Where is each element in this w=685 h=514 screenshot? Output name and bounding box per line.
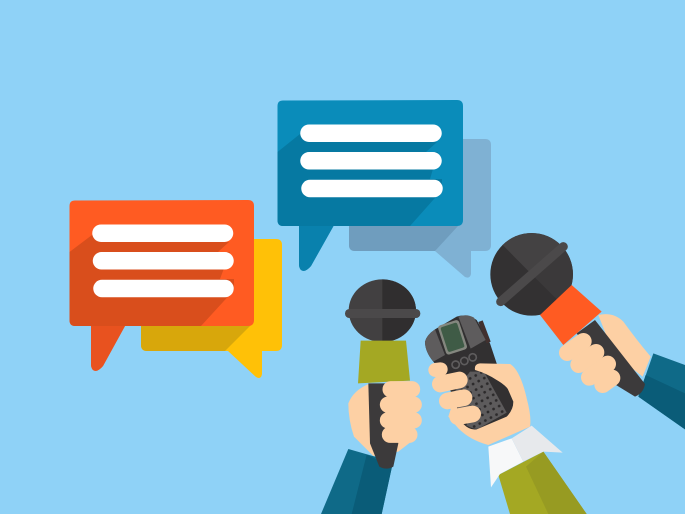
teal sleeve	[638, 353, 685, 429]
shadow on orange bubble	[70, 235, 234, 326]
recorder body	[425, 316, 513, 430]
speech bubble: pale blue back bubble	[349, 139, 491, 278]
palm	[448, 364, 530, 445]
microphone head	[349, 279, 416, 342]
recorder dotted grille	[453, 372, 507, 429]
fingers	[388, 389, 414, 435]
microphone head	[490, 233, 573, 316]
text lines on blue bubble	[309, 133, 434, 188]
hand holding voice recorder	[425, 315, 587, 514]
recorder grey cap	[425, 329, 445, 362]
shadow on pale blue bubble	[349, 226, 458, 251]
hand holding orange microphone	[490, 233, 685, 429]
shadow on blue bubble	[278, 134, 442, 226]
microphone band	[501, 247, 563, 302]
handle	[368, 383, 398, 469]
shadow on yellow bubble	[141, 324, 252, 351]
thumb	[475, 363, 527, 402]
back of hand	[598, 314, 651, 377]
text lines on orange bubble	[101, 233, 225, 288]
recorder side button	[478, 320, 491, 344]
recorder buttons	[452, 354, 476, 368]
olive collar	[358, 341, 410, 383]
handle	[577, 320, 645, 397]
fingers	[567, 341, 612, 385]
fingers	[435, 369, 473, 417]
speech bubble: yellow back bubble	[141, 239, 282, 378]
microphone band	[345, 309, 420, 318]
olive jacket sleeve	[498, 452, 587, 514]
blue bubble tail	[299, 226, 334, 271]
speech bubble: blue front bubble	[278, 100, 463, 271]
teal sleeve	[321, 449, 392, 514]
shirt cuff	[488, 438, 523, 487]
orange bubble tail	[91, 326, 125, 371]
hand holding olive microphone	[321, 279, 420, 514]
recorder screen	[437, 319, 468, 355]
speech bubble: orange front bubble	[70, 200, 254, 371]
orange collar	[540, 285, 602, 345]
palm	[348, 383, 413, 456]
